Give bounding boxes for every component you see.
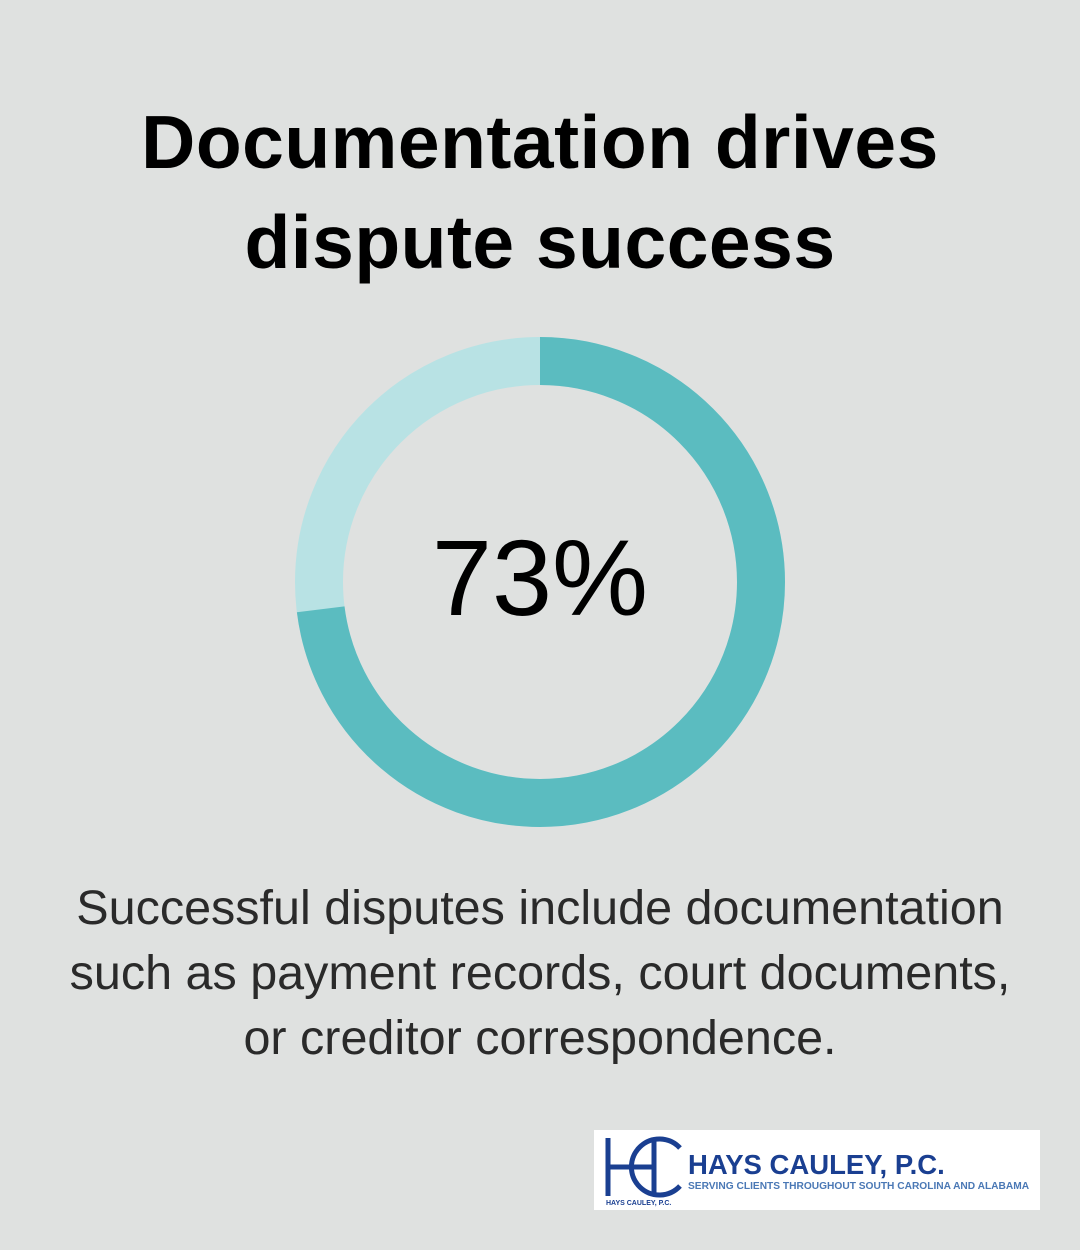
logo	[594, 1130, 1040, 1210]
description: Successful disputes include documentation	[76, 881, 1004, 935]
logo: HAYS CAULEY, P.C.	[688, 1149, 945, 1180]
title: dispute success	[244, 200, 836, 284]
logo: HAYS CAULEY, P.C.	[606, 1200, 671, 1207]
title	[141, 100, 939, 284]
description	[70, 881, 1010, 1065]
percentage: 73%	[432, 517, 648, 638]
logo: SERVING CLIENTS THROUGHOUT SOUTH CAROLINA AND ALABAMA	[688, 1181, 1029, 1192]
title: Documentation drives	[141, 100, 939, 184]
icon: HC monogram	[606, 1136, 682, 1198]
description: such as payment records, court documents,	[70, 946, 1010, 1000]
description: or creditor correspondence.	[243, 1011, 837, 1065]
